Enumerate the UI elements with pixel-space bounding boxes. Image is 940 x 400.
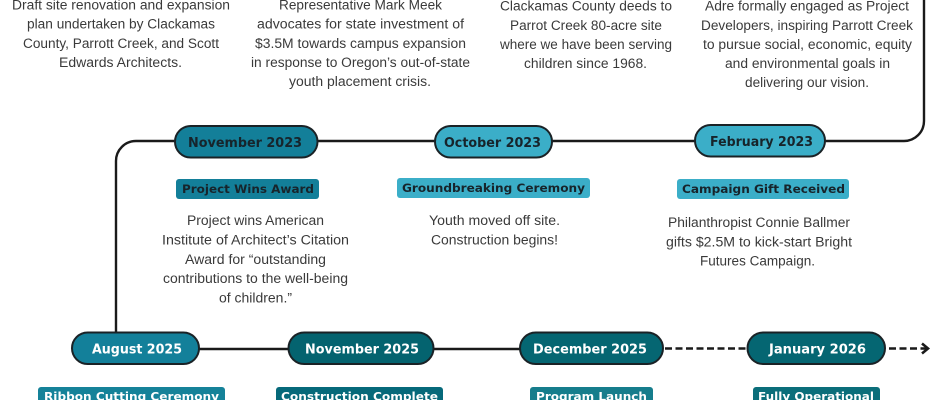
text block: award description: of children.” — [219, 290, 292, 306]
text block: state investment advocacy: advocates for state investment of — [257, 17, 464, 32]
text block: county deed: Parrot Creek 80-acre site — [510, 18, 662, 33]
text block: award description: Award for “outstanding — [185, 252, 326, 267]
text block: draft site plan: Edwards Architects. — [59, 55, 182, 70]
date pill: December 2025 — [520, 332, 663, 364]
text block: county deed — [499, 0, 672, 71]
arrow: dashed continuation after January 2026 — [889, 344, 928, 354]
timeline connector: dashed segment between December 2025 and January 2026 — [665, 347, 747, 350]
date pill: November 2025: November 2025 — [305, 342, 419, 358]
tag: Campaign Gift Received: Campaign Gift Received — [682, 182, 845, 196]
date pill: October 2023 — [435, 126, 552, 158]
date pill: November 2025 — [288, 332, 434, 364]
date pill: January 2026 — [748, 332, 885, 364]
text block: groundbreaking description: Construction begins! — [431, 232, 558, 248]
text block: project developers: and environmental goals in — [725, 56, 890, 71]
date pill: February 2023 — [695, 125, 825, 156]
date pill: November 2023 — [175, 126, 318, 158]
text block: groundbreaking description — [429, 213, 560, 248]
text block: campaign gift description — [666, 215, 852, 268]
text block: county deed: where we have been serving — [499, 37, 672, 52]
date pill: November 2023: November 2023 — [188, 135, 302, 151]
text block: project developers: to pursue social, economic, equity — [703, 37, 912, 52]
text block: county deed: children since 1968. — [524, 56, 647, 71]
text block: project developers: delivering our vision. — [745, 75, 869, 90]
text block: state investment advocacy: in response to Oregon’s out-of-state — [251, 55, 470, 70]
text block: draft site plan — [12, 0, 230, 70]
text block: campaign gift description: gifts $2.5M to kick-start Bright — [666, 234, 852, 250]
tag: Project Wins Award — [176, 179, 319, 199]
text block: award description — [162, 213, 349, 306]
text block: state investment advocacy: youth placement crisis. — [289, 74, 431, 89]
text block: project developers — [701, 0, 913, 90]
text block: award description: Project wins American — [187, 213, 324, 228]
date pill: August 2025: August 2025 — [92, 342, 182, 358]
text block: draft site plan: plan undertaken by Clackamas — [27, 17, 215, 32]
date pill: October 2023: October 2023 — [444, 135, 541, 151]
date pill: February 2023: February 2023 — [710, 134, 813, 150]
tag: Groundbreaking Ceremony: Groundbreaking Ceremony — [402, 181, 585, 195]
text block: draft site plan: County, Parrott Creek, and Scott — [23, 36, 219, 51]
text block: campaign gift description: Futures Campaign. — [700, 254, 815, 268]
text block: campaign gift description: Philanthropist Connie Ballmer — [668, 215, 851, 230]
date pill: December 2025: December 2025 — [533, 342, 647, 358]
date pill: August 2025 — [72, 332, 199, 364]
date pill: January 2026: January 2026 — [768, 342, 866, 358]
timeline connector: solid path — [116, 0, 924, 349]
tag: Groundbreaking Ceremony — [397, 178, 590, 198]
text block: state investment advocacy: $3.5M towards campus expansion — [255, 36, 466, 51]
text block: state investment advocacy — [251, 0, 470, 89]
text block: project developers: Developers, inspiring Parrott Creek — [701, 18, 913, 33]
text block: award description: Institute of Architect’s Citation — [162, 232, 349, 248]
text block: groundbreaking description: Youth moved off site. — [429, 213, 560, 228]
text block: award description: contributions to the well-being — [163, 271, 348, 286]
tag: Campaign Gift Received — [677, 179, 849, 199]
tag: Project Wins Award: Project Wins Award — [182, 182, 314, 196]
